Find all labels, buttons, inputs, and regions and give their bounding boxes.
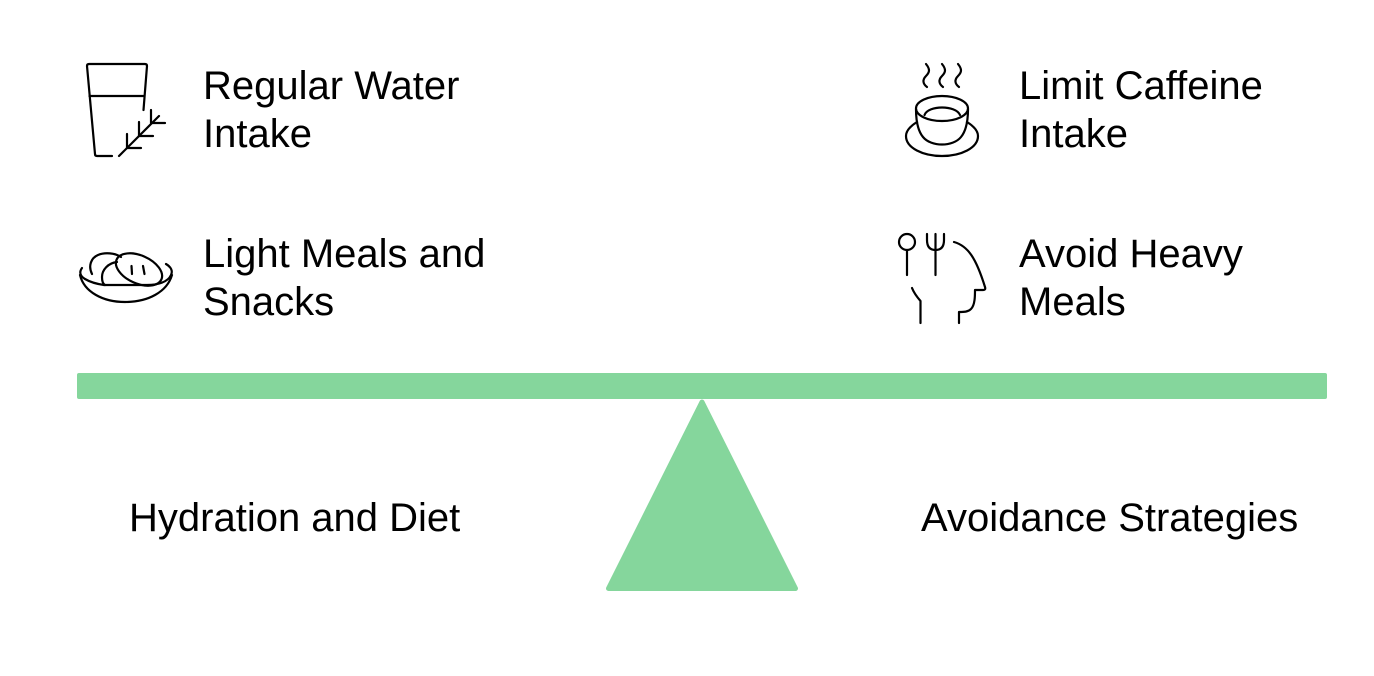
text: Light Meals and Snacks: Light Meals and xyxy=(203,232,485,276)
text: Limit Caffeine Intake xyxy=(1019,64,1263,156)
text: Regular Water Intake: Regular Water xyxy=(203,64,459,108)
text: Avoidance Strategies: Avoidance Strategies xyxy=(921,496,1298,540)
text: Hydration and Diet: Hydration and Diet xyxy=(129,496,460,540)
text: Limit Caffeine Intake: Intake xyxy=(1019,112,1128,156)
text: Avoid Heavy Meals: Meals xyxy=(1019,280,1126,324)
text: Light Meals and Snacks: Snacks xyxy=(203,280,334,324)
text: Avoid Heavy Meals xyxy=(1019,232,1243,324)
text: Light Meals and Snacks xyxy=(203,232,485,324)
text: Regular Water Intake: Intake xyxy=(203,112,312,156)
text: Avoid Heavy Meals: Avoid Heavy xyxy=(1019,232,1243,276)
text: Limit Caffeine Intake: Limit Caffeine xyxy=(1019,64,1263,108)
text: Regular Water Intake xyxy=(203,64,459,156)
scale beam xyxy=(77,373,1327,399)
scale fulcrum triangle xyxy=(608,402,796,588)
